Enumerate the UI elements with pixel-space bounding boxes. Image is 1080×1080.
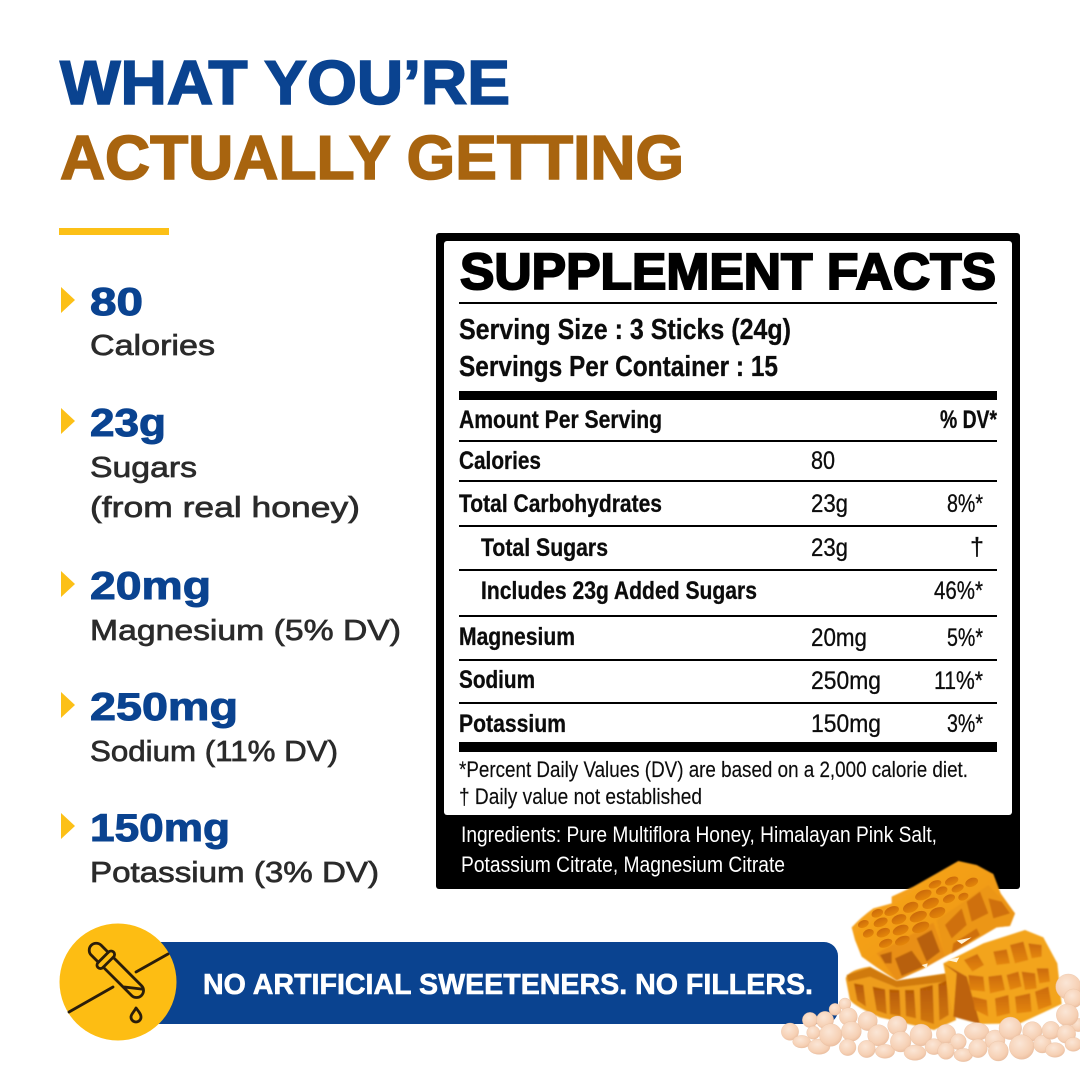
table header: % DV* [940,406,997,434]
row: total carbohydrates: Total Carbohydrates [459,490,662,518]
row: sodium: Sodium [459,666,535,694]
title [60,49,684,193]
row: total carbohydrates: 8%* [947,490,983,518]
item: sugars: Sugars [90,452,197,484]
item: magnesium: Magnesium (5% DV) [90,615,401,647]
serving information: Servings Per Container : 15 [459,351,778,383]
ingredients [461,822,937,877]
row: magnesium: 20mg [811,624,867,652]
row: calories: 80 [811,447,835,475]
row: sodium: 250mg [811,667,881,695]
footnotes: † Daily value not established [459,784,702,809]
item: sugars: 23g [90,402,166,445]
row: sodium [459,666,983,695]
row: potassium [459,710,983,738]
row: total carbohydrates [459,490,983,518]
row: calories [459,447,835,475]
item: sodium: Sodium (11% DV) [90,736,338,768]
serving information [459,314,791,383]
row: magnesium: 5%* [947,624,983,652]
item: calories: 80 [90,281,143,324]
item: calories [61,281,215,362]
table header: Amount Per Serving [459,406,662,434]
row: calories: Calories [459,447,541,475]
row: magnesium [459,623,983,652]
item: magnesium [61,565,401,647]
item: potassium: 150mg [90,807,230,850]
honeycomb: top [852,861,1015,981]
honeycomb: bottom left [846,967,956,1030]
title: WHAT YOU’RE [60,49,510,118]
item: sodium: 250mg [90,686,238,729]
row: added sugars [481,577,983,605]
ingredients: Ingredients: Pure Multiflora Honey, Himalayan Pink Salt, [461,822,937,847]
row: added sugars: Includes 23g Added Sugars [481,577,757,605]
row: magnesium: Magnesium [459,623,575,651]
item: potassium [61,807,379,889]
item: magnesium: 20mg [90,565,211,608]
serving information: Serving Size : 3 Sticks (24g) [459,314,791,346]
row: potassium: 3%* [947,710,983,738]
panel: supplement facts [436,233,1020,889]
row: added sugars: 46%* [934,577,983,605]
row: total sugars: 23g [811,534,848,562]
item: sugars [61,402,360,524]
ingredients: Potassium Citrate, Magnesium Citrate [461,852,785,877]
footnotes: *Percent Daily Values (DV) are based on a 2,000 calorie diet. [459,757,968,782]
row: total carbohydrates: 23g [811,490,848,518]
pink salt balls [781,974,1080,1062]
table header [459,406,997,434]
banner [150,942,838,1024]
nutrient list [61,281,401,889]
row: total sugars [481,533,984,562]
icon: crossed-out dropper [60,924,176,1040]
item: sodium [61,686,338,768]
row: potassium: Potassium [459,710,566,738]
row: potassium: 150mg [811,710,881,738]
honeycomb: right [943,930,1062,1024]
item: potassium: Potassium (3% DV) [90,857,379,889]
item: calories: Calories [90,330,215,362]
title: ACTUALLY GETTING [60,124,684,193]
accent bar [59,228,169,235]
illustration: honeycomb and pink salt [781,861,1080,1062]
heading: supplement facts: SUPPLEMENT FACTS [460,243,996,300]
row: total sugars: † [970,533,984,561]
footnotes [459,757,968,809]
table rules [459,302,997,752]
item: sugars: (from real honey) [90,492,360,524]
banner: NO ARTIFICIAL SWEETENERS. NO FILLERS. [203,969,813,1001]
row: total sugars: Total Sugars [481,534,608,562]
row: sodium: 11%* [934,667,983,695]
